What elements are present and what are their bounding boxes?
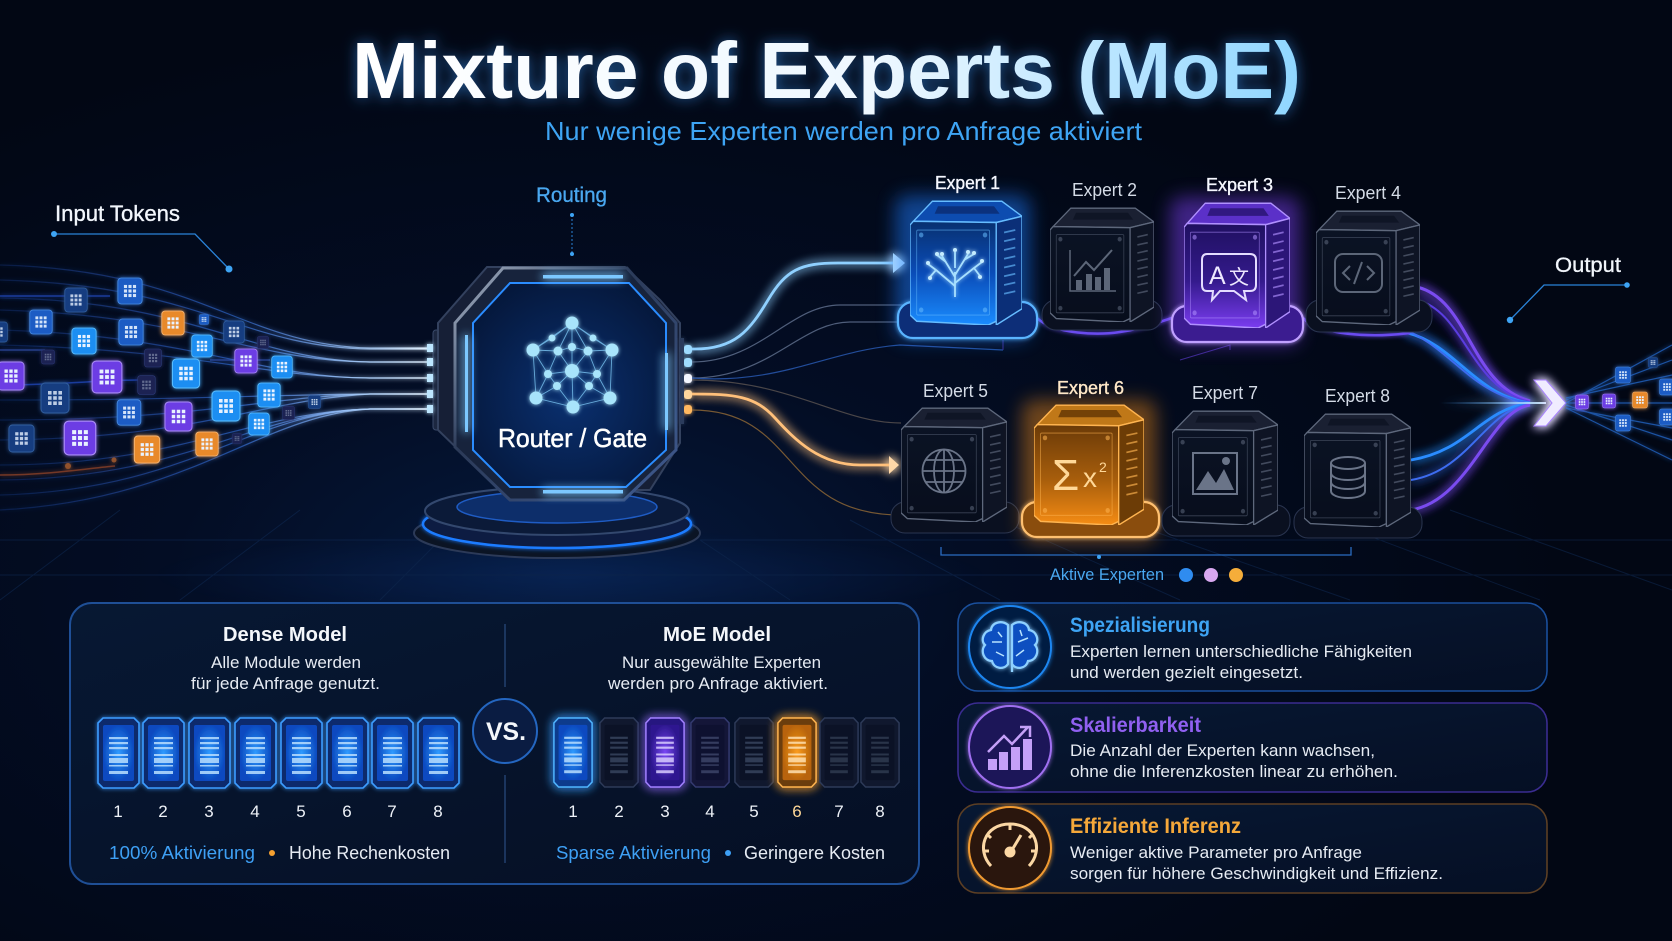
moe model heading: Nur ausgewählte Experten [622, 654, 821, 672]
card: spezialisierung [958, 603, 1547, 691]
callout: output: Output [1555, 254, 1621, 277]
dense model heading: für jede Anfrage genutzt. [191, 675, 380, 693]
label: Expert 5 [923, 381, 988, 401]
dense numbers: 8 [433, 802, 443, 821]
icon: network [526, 316, 618, 414]
icon: code [1335, 254, 1382, 292]
output arrow [1534, 380, 1566, 426]
expert 6 [1022, 378, 1159, 542]
moe footer: Geringere Kosten [744, 843, 885, 863]
text: Skalierbarkeit [1070, 714, 1201, 737]
light bars [465, 275, 668, 494]
card: effiziente inferenz [958, 804, 1547, 893]
expert 8 [1294, 386, 1422, 538]
dense numbers: 3 [204, 802, 214, 821]
moe model heading [607, 624, 828, 693]
icon: database [1331, 457, 1365, 498]
icon: translate bubble: 文 [1229, 266, 1249, 289]
connectors [427, 338, 692, 424]
expert 2 [1042, 180, 1162, 330]
dense numbers [113, 802, 443, 821]
callout: routing [536, 184, 607, 256]
vs badge [473, 699, 537, 763]
icon: growth chart [969, 706, 1051, 788]
icon: sigma: Σ [1052, 451, 1079, 500]
icon: brain [969, 606, 1051, 688]
bracket: active experts [941, 547, 1351, 584]
card: skalierbarkeit [958, 703, 1547, 792]
moe numbers: 4 [705, 802, 715, 821]
text: Spezialisierung [1070, 614, 1210, 637]
label: Expert 3 [1206, 175, 1273, 195]
text: Effiziente Inferenz [1070, 815, 1241, 838]
icon: tree [926, 248, 984, 297]
moe numbers: 3 [660, 802, 670, 821]
panel: dense vs moe [70, 603, 919, 884]
callout: output [1507, 254, 1630, 323]
colour streaks [0, 296, 270, 475]
expert links [1037, 318, 1410, 335]
output flows [1400, 287, 1546, 510]
left connector block [433, 330, 453, 430]
callout: input tokens [51, 201, 232, 272]
moe numbers: 6 [792, 802, 802, 821]
label: Expert 4 [1335, 183, 1401, 203]
card: skalierbarkeit: Die Anzahl der Experten kann wachsen, [1070, 742, 1375, 760]
icon: globe [922, 450, 966, 492]
title: Mixture of Experts (MoE) [352, 26, 1301, 115]
input tokens [0, 278, 321, 463]
output tokens [1566, 345, 1672, 460]
expert 7 [1162, 383, 1290, 536]
expert 3 [1170, 175, 1303, 345]
router screen [473, 283, 666, 487]
callout: routing: Routing [536, 184, 607, 207]
moe model heading: MoE Model [663, 624, 771, 646]
icon: sigma [1052, 451, 1107, 500]
dense numbers: 6 [342, 802, 352, 821]
router / gate [427, 267, 692, 500]
label: Expert 2 [1072, 180, 1137, 200]
icon: image [1193, 453, 1237, 494]
expert 5 [891, 381, 1019, 533]
icon: translate bubble [1202, 254, 1256, 300]
moe footer [556, 843, 885, 863]
vs badge: VS. [486, 718, 526, 746]
icon: sigma: x [1083, 462, 1097, 493]
dense model heading: Dense Model [223, 624, 347, 646]
moe numbers: 8 [875, 802, 885, 821]
moe numbers: 1 [568, 802, 578, 821]
label: Expert 7 [1192, 383, 1258, 403]
arrow: router to expert 1 [692, 253, 905, 349]
moe numbers: 2 [614, 802, 624, 821]
dense numbers: 1 [113, 802, 123, 821]
card: spezialisierung: Experten lernen unterschiedliche Fähigkeiten [1070, 643, 1412, 661]
moe model heading: werden pro Anfrage aktiviert. [607, 675, 828, 693]
callout: input tokens: Input Tokens [55, 201, 180, 226]
card: spezialisierung: und werden gezielt eingesetzt. [1070, 664, 1303, 682]
dense numbers: 4 [250, 802, 260, 821]
moe footer: Sparse Aktivierung [556, 843, 711, 863]
dense footer [109, 843, 450, 863]
bracket: active experts: Aktive Experten [1050, 565, 1164, 584]
icon: translate bubble: A [1209, 262, 1226, 290]
subtitle: Nur wenige Experten werden pro Anfrage aktiviert [545, 116, 1143, 146]
router rear body [438, 267, 680, 490]
icon: chart [1070, 250, 1116, 291]
icon: gauge [969, 807, 1051, 889]
expert 4 [1306, 183, 1432, 332]
dense bars [98, 718, 459, 788]
card: effiziente inferenz: Weniger aktive Parameter pro Anfrage [1070, 844, 1362, 862]
dense footer: 100% Aktivierung [109, 843, 255, 863]
dense numbers: 7 [387, 802, 397, 821]
expert 1 [895, 173, 1037, 340]
label: Expert 1 [935, 173, 1000, 193]
dense model heading [191, 624, 380, 693]
input flow lines [0, 265, 430, 510]
label: Expert 8 [1325, 386, 1390, 406]
card: effiziente inferenz: sorgen für höhere Geschwindigkeit und Effizienz. [1070, 865, 1443, 883]
moe numbers: 7 [834, 802, 844, 821]
router bezel [455, 268, 676, 500]
moe numbers [568, 802, 885, 821]
divider [504, 624, 506, 863]
dense footer: Hohe Rechenkosten [289, 843, 450, 863]
platform [414, 487, 700, 558]
thin routes [692, 305, 1003, 515]
dense numbers: 5 [296, 802, 306, 821]
router label: Router / Gate [498, 423, 647, 453]
label: Expert 6 [1057, 378, 1124, 398]
card: skalierbarkeit: ohne die Inferenzkosten linear zu erhöhen. [1070, 763, 1398, 781]
dense numbers: 2 [158, 802, 168, 821]
dense model heading: Alle Module werden [211, 654, 361, 672]
icon: sigma: 2 [1099, 459, 1107, 475]
moe numbers: 5 [749, 802, 759, 821]
arrow: router to expert 5 [692, 394, 899, 474]
floor grid [0, 510, 1672, 620]
moe bars [554, 718, 899, 787]
